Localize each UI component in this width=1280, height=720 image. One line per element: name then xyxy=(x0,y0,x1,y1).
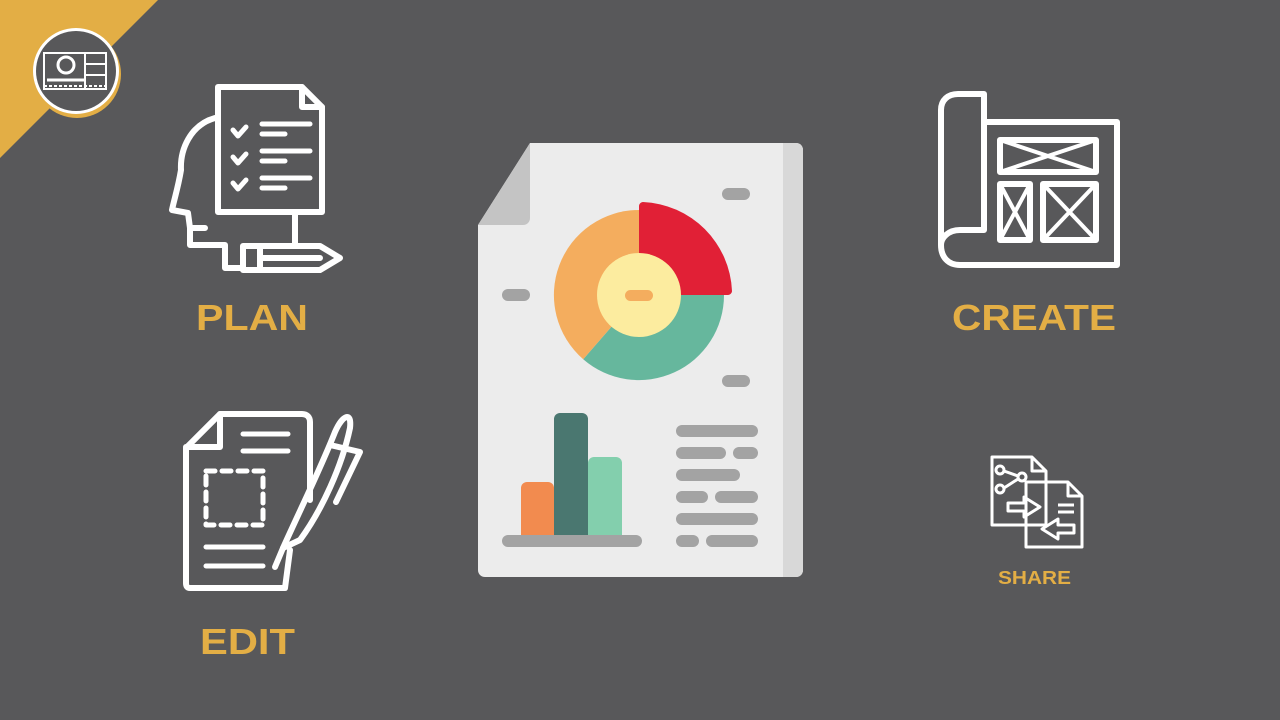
text lines xyxy=(676,425,758,547)
pie chart xyxy=(554,202,732,380)
icon: share (two documents with arrows) xyxy=(992,457,1082,547)
heading: SHARE: SHARE xyxy=(998,568,1071,588)
bar chart xyxy=(502,413,642,547)
icon: edit (document with pen) xyxy=(186,414,360,588)
logo badge xyxy=(33,28,121,118)
icon: plan (head with checklist) xyxy=(172,87,340,270)
heading: EDIT: EDIT xyxy=(200,621,295,662)
heading: CREATE: CREATE xyxy=(952,297,1116,338)
heading: PLAN: PLAN xyxy=(196,297,308,338)
central report document xyxy=(478,143,803,577)
small labels xyxy=(502,188,750,387)
corner banner xyxy=(0,0,158,158)
icon: create (blueprint wireframe) xyxy=(941,94,1117,265)
folded corner xyxy=(478,143,530,225)
